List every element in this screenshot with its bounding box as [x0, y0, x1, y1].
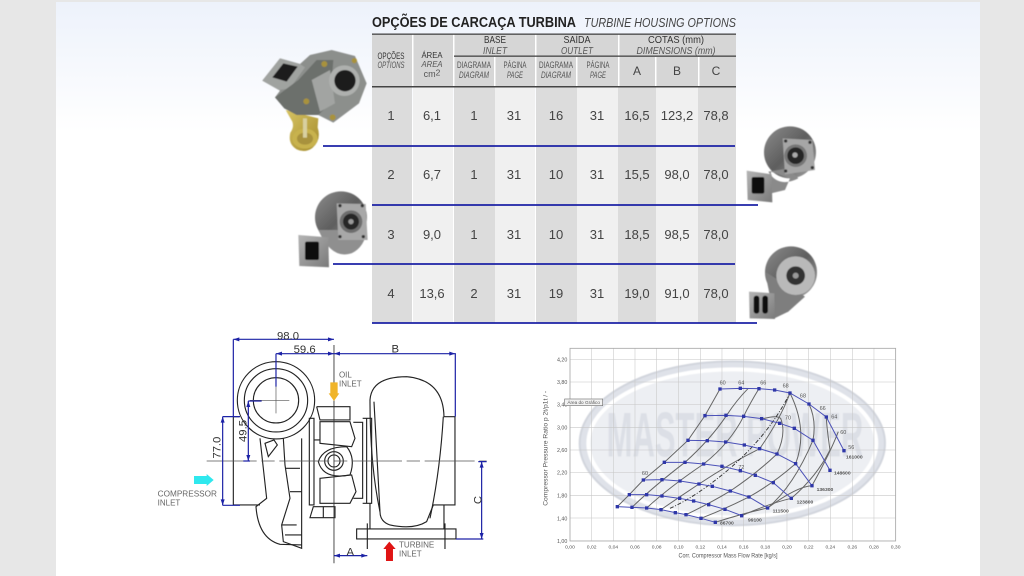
table row 1: 16 [549, 108, 563, 123]
table title: TURBINE HOUSING OPTIONS [584, 15, 736, 30]
table header text: A [633, 64, 641, 78]
table row 3: 31 [507, 227, 521, 242]
table row 4: 31 [507, 286, 521, 301]
x axis tick labels: 0,28 [869, 544, 879, 550]
efficiency labels [642, 380, 854, 477]
x axis tick labels: 0,26 [847, 544, 857, 550]
table row 4 [387, 286, 729, 301]
table column shading [372, 34, 736, 323]
plot grid [570, 348, 896, 541]
efficiency labels: 64 [738, 380, 744, 386]
label: turbine inlet: INLET [399, 549, 422, 558]
table title [372, 13, 736, 31]
table row 3: 31 [590, 227, 604, 242]
table header text: ÁREA [422, 50, 443, 60]
table row 4: 19,0 [624, 286, 650, 301]
rotor speed labels: 86700 [720, 520, 734, 526]
table row 4: 78,0 [703, 286, 729, 301]
table row 4: 2 [470, 286, 478, 301]
y axis tick labels: 3,00 [557, 425, 567, 431]
table row 2: 31 [590, 167, 604, 182]
table row 2: 6,7 [423, 167, 441, 182]
y axis tick labels: 3,40 [557, 403, 567, 409]
table header text: cm [424, 69, 436, 79]
table row 1: 78,8 [703, 108, 729, 123]
x axis tick labels: 0,14 [717, 544, 727, 550]
table header text: OPTIONS [378, 60, 405, 71]
rotor speed labels: 99100 [748, 518, 762, 524]
table row 3: 10 [549, 227, 563, 242]
table row 3: 78,0 [703, 227, 729, 242]
efficiency labels: 68 [783, 383, 789, 389]
table header text: INLET [483, 46, 508, 57]
table row 1: 6,1 [423, 108, 441, 123]
efficiency labels: 60 [840, 430, 846, 436]
peak efficiency dashed line [670, 393, 790, 508]
rotor speed labels: 123800 [797, 500, 814, 506]
dimension labels: 98.0 [277, 330, 299, 342]
table header text [378, 33, 721, 80]
label: oil inlet: OIL [339, 371, 352, 380]
table row 3 [387, 227, 729, 242]
table header text: B [673, 64, 681, 78]
x axis tick labels: 0,16 [739, 544, 749, 550]
arrow: turbine inlet [383, 542, 396, 561]
x axis tick labels: 0,06 [630, 544, 640, 550]
dimension labels: C [472, 496, 484, 504]
y axis tick labels: 1,80 [557, 494, 567, 500]
table row 4: 4 [387, 286, 395, 301]
chart area tooltip: Área do Gráfico [567, 399, 600, 405]
speed line data points [616, 387, 846, 524]
efficiency labels: 72 [738, 465, 744, 471]
dimension labels: 77.0 [212, 437, 224, 459]
y axis tick labels: 1,00 [557, 539, 567, 545]
table row 3: 9,0 [423, 227, 441, 242]
rotor speed labels: 161000 [846, 455, 863, 461]
x axis tick labels: 0,18 [760, 544, 770, 550]
table row 2: 1 [470, 167, 478, 182]
efficiency labels: 66 [820, 406, 826, 412]
x axis tick labels: 0,10 [674, 544, 684, 550]
y axis tick labels [557, 357, 567, 545]
table row 2: 10 [549, 167, 563, 182]
x axis tick labels: 0,22 [804, 544, 814, 550]
table header text: PÁGINA [586, 60, 610, 70]
efficiency labels: 66 [760, 381, 766, 387]
table header text: C [712, 64, 721, 78]
y axis tick labels: 1,40 [557, 516, 567, 522]
photo: twin-entry turbine housing option 4 [749, 246, 817, 319]
table row 1: 16,5 [624, 108, 650, 123]
table row 3: 18,5 [624, 227, 650, 242]
table row 1: 1 [387, 108, 395, 123]
y axis tick labels: 2,20 [557, 471, 567, 477]
dimension labels: A [347, 547, 355, 559]
y axis tick labels: 2,60 [557, 448, 567, 454]
chart: compressor map [542, 348, 901, 559]
table row 1: 31 [507, 108, 521, 123]
row separator lines [323, 146, 758, 323]
table header text: DIAGRAM [459, 70, 489, 80]
label: oil inlet: INLET [339, 379, 362, 388]
table row 1: 123,2 [661, 108, 693, 123]
y axis tick labels: 4,20 [557, 357, 567, 363]
efficiency labels: 56 [848, 445, 854, 451]
table title: OPÇÕES DE CARCAÇA TURBINA [372, 13, 576, 31]
table row 2 [387, 167, 729, 182]
table header text: DIAGRAMA [539, 60, 573, 70]
table header text: OUTLET [561, 46, 594, 57]
label: turbine inlet: TURBINE [399, 540, 434, 549]
x axis tick labels: 0,20 [782, 544, 792, 550]
label: compressor inlet: INLET [158, 498, 180, 507]
rotor speed labels: 111500 [773, 508, 789, 514]
efficiency labels: 70 [785, 416, 791, 422]
table header text: DIAGRAM [541, 70, 571, 80]
dimension labels [212, 330, 484, 559]
table header text: AREA [421, 59, 443, 69]
table header text: DIMENSIONS (mm) [636, 46, 716, 57]
label: oil inlet [339, 371, 362, 388]
table header text: PÁGINA [504, 60, 526, 70]
table row 4: 13,6 [419, 286, 445, 301]
centre lines [207, 345, 487, 563]
table header text: PAGE [507, 70, 524, 80]
rotor speed labels [720, 455, 863, 526]
table header text: OPÇÕES [378, 51, 404, 62]
table row 4: 31 [590, 286, 604, 301]
table header text: COTAS (mm) [648, 35, 704, 46]
chart area tooltip [565, 399, 603, 406]
table row 1 [387, 108, 729, 123]
label: turbine inlet [399, 540, 434, 558]
panel: turbine housing options table [323, 13, 758, 323]
dimension labels: 49.5 [238, 420, 250, 442]
table row 2: 31 [507, 167, 521, 182]
table row 1: 1 [470, 108, 478, 123]
table row 2: 78,0 [703, 167, 729, 182]
x axis tick labels: 0,08 [652, 544, 662, 550]
efficiency labels: 64 [831, 415, 837, 421]
arrow: compressor inlet [194, 474, 214, 486]
table row 3: 3 [387, 227, 395, 242]
photo: wastegate turbine housing option 1 [262, 50, 367, 151]
table header text: 2 [436, 68, 441, 78]
y axis tick labels: 3,80 [557, 380, 567, 386]
dimension labels: B [392, 344, 399, 356]
table header text: SAÍDA [564, 33, 591, 46]
x axis tick labels: 0,04 [608, 544, 618, 550]
table row 1: 31 [590, 108, 604, 123]
x axis title: Corr. Compressor Mass Flow Rate [kg/s] [678, 553, 778, 559]
table row 3: 98,5 [664, 227, 690, 242]
rotor speed labels: 136300 [817, 487, 833, 493]
label: compressor inlet: COMPRESSOR [158, 489, 217, 498]
label: compressor inlet [158, 489, 217, 507]
table row 2: 2 [387, 167, 395, 182]
efficiency labels: 60 [720, 380, 726, 386]
efficiency contour lines [617, 388, 838, 522]
dimension labels: 59.6 [294, 344, 316, 356]
technical drawing: turbocharger dimensions [158, 330, 487, 563]
table row 2: 15,5 [624, 167, 650, 182]
x axis tick labels: 0,02 [587, 544, 597, 550]
y axis title: Compressor Pressure Ratio p 2t/p1t / - [542, 391, 549, 506]
x axis tick labels [565, 544, 901, 550]
rotor speed labels: 148600 [834, 470, 851, 476]
x axis tick labels: 0,12 [695, 544, 705, 550]
table header text: BASE [484, 35, 506, 46]
speed lines [617, 388, 844, 522]
table row 2: 98,0 [664, 167, 690, 182]
table row 4: 19 [549, 286, 563, 301]
turbocharger outline [233, 362, 456, 549]
efficiency labels: 60 [642, 471, 648, 477]
x axis tick labels: 0,30 [891, 544, 901, 550]
table row 4: 91,0 [664, 286, 690, 301]
watermark logo [580, 361, 885, 525]
efficiency labels: 68 [800, 393, 806, 399]
dimension lines [221, 337, 487, 558]
table header text: PAGE [590, 70, 607, 80]
arrow: oil inlet [329, 382, 339, 401]
table row 3: 1 [470, 227, 478, 242]
table header text: DIAGRAMA [457, 60, 491, 70]
photo: turbine housing option 3 [298, 191, 368, 267]
x axis tick labels: 0,24 [825, 544, 835, 550]
photo: turbine housing option 2 [747, 126, 816, 202]
x axis tick labels: 0,00 [565, 544, 575, 550]
